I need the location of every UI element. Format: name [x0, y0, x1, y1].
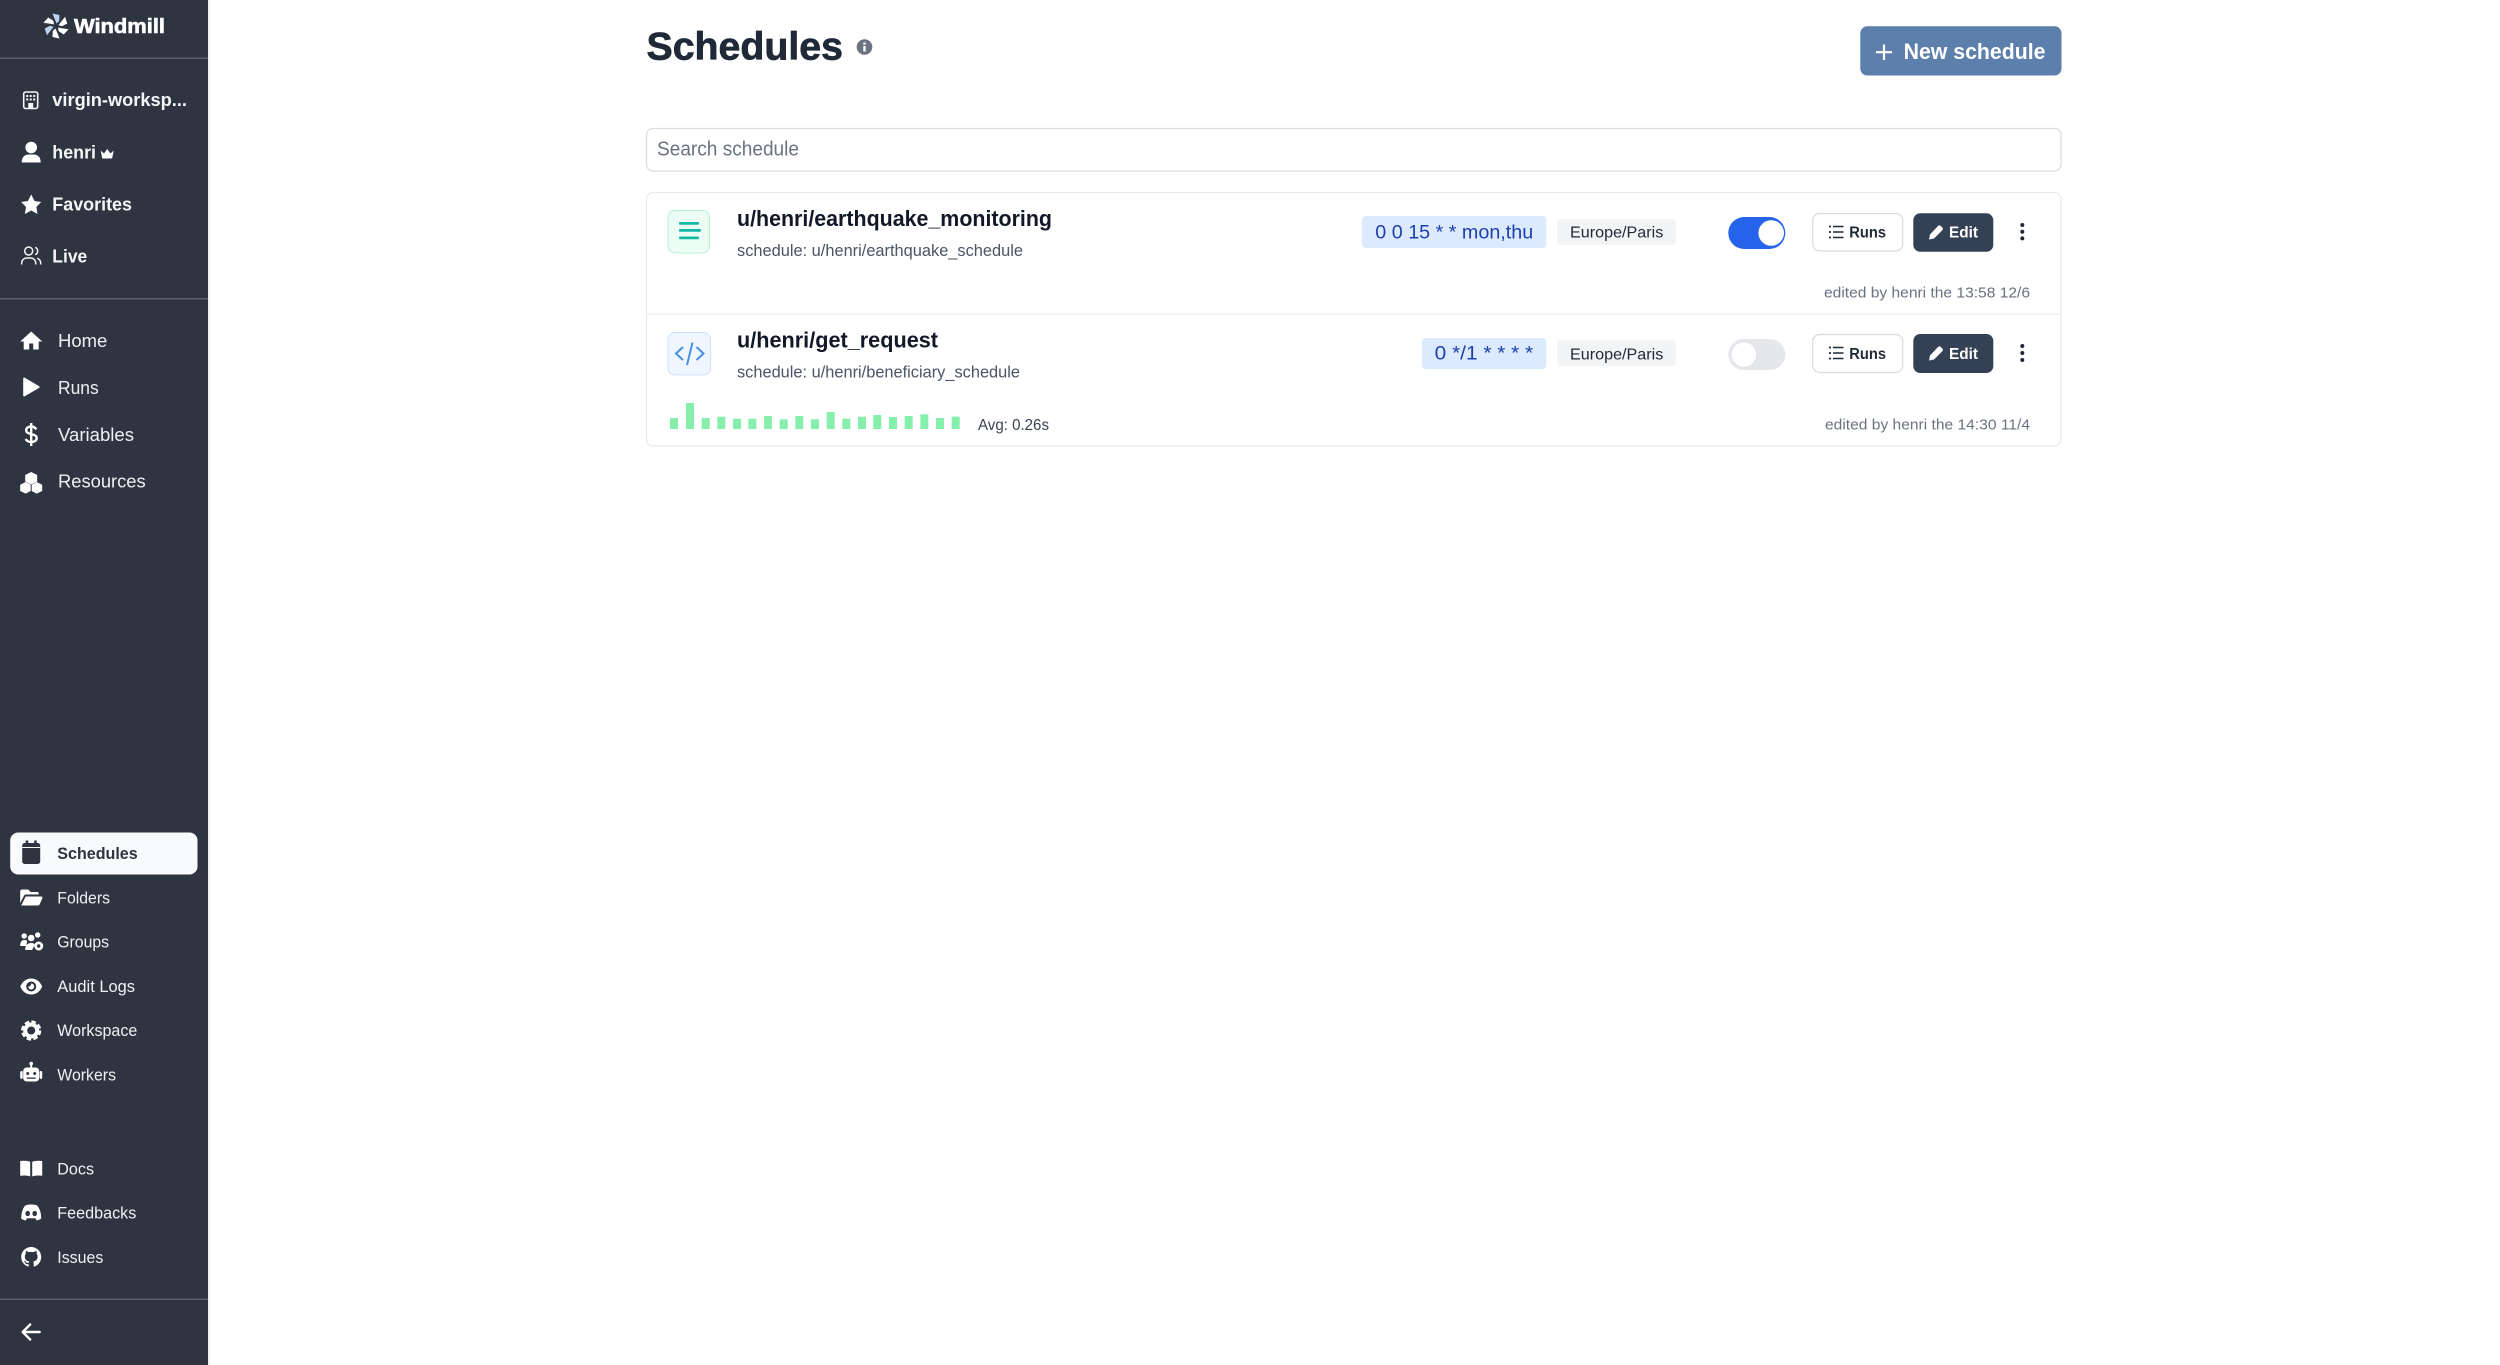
menu item: live	[22, 246, 87, 267]
search input	[646, 128, 2061, 171]
menu item: live: Live	[52, 246, 87, 267]
menu item: groups	[20, 932, 109, 952]
icon: code	[668, 332, 710, 375]
schedule path: schedule: u/henri/beneficiary_schedule	[737, 363, 1020, 382]
button: runs: Runs	[1849, 346, 1886, 363]
menu item: workspace: virgin-worksp...	[52, 89, 187, 110]
menu item: feedbacks: Feedbacks	[57, 1205, 136, 1223]
menu item: workers	[20, 1062, 116, 1085]
panel: schedule list	[646, 192, 2061, 446]
row: earthquake_monitoring	[668, 206, 2030, 301]
button: edit: Edit	[1949, 225, 1979, 242]
toggle: off	[1728, 339, 1785, 370]
search input: Search schedule	[657, 139, 799, 161]
menu item: user henri: henri	[52, 142, 96, 162]
edited meta: edited by henri the 14:30 11/4	[1825, 416, 2030, 434]
button: new schedule	[1860, 26, 2062, 76]
menu item: resources: Resources	[58, 470, 146, 492]
menu: kebab	[2020, 344, 2024, 362]
button: edit	[1913, 213, 1993, 252]
menu item: resources	[20, 470, 146, 494]
icon: info	[857, 39, 872, 55]
button: runs: Runs	[1849, 225, 1886, 242]
badge: timezone	[1557, 340, 1676, 366]
menu item: docs	[20, 1160, 94, 1178]
icon: collapse arrow	[23, 1324, 40, 1340]
heading: Schedules: Schedules	[646, 25, 843, 68]
menu item: folders	[20, 889, 110, 907]
menu item: schedules (active)	[10, 832, 198, 874]
menu item: variables	[26, 423, 134, 446]
menu item: workspace settings	[22, 1022, 137, 1040]
script path: u/henri/earthquake_monitoring	[737, 206, 1052, 231]
average runtime: Avg: 0.26s	[978, 417, 1049, 434]
menu item: folders: Folders	[57, 889, 110, 907]
button: new schedule: New schedule	[1904, 39, 2046, 64]
menu item: groups: Groups	[57, 934, 109, 952]
button: edit	[1913, 334, 1993, 373]
badge: cron	[1422, 338, 1546, 369]
edited meta: edited by henri the 13:58 12/6	[1824, 284, 2030, 301]
chart: runtime sparkline	[670, 403, 960, 429]
toggle: on	[1728, 217, 1785, 249]
row: get_request	[668, 328, 2030, 434]
schedule path: schedule: u/henri/earthquake_schedule	[737, 241, 1023, 260]
button: runs	[1813, 334, 1903, 372]
panel: sidebar	[0, 0, 210, 1365]
menu item: runs	[23, 377, 99, 398]
badge: timezone: Europe/Paris	[1570, 225, 1663, 242]
menu item: issues	[21, 1247, 103, 1267]
badge: timezone: Europe/Paris	[1570, 346, 1663, 363]
menu item: workers: Workers	[57, 1067, 116, 1085]
logo: Windmill: Windmill	[74, 15, 165, 38]
badge: cron: 0 0 15 * * mon,thu	[1375, 222, 1533, 244]
menu item: variables: Variables	[58, 424, 134, 445]
menu item: home	[20, 330, 107, 351]
button: runs	[1813, 214, 1903, 251]
menu item: audit logs	[20, 978, 135, 996]
badge: timezone	[1557, 219, 1676, 245]
badge: cron: 0 */1 * * * *	[1435, 342, 1534, 364]
menu item: schedules (active): Schedules	[57, 845, 138, 863]
menu item: runs: Runs	[58, 377, 99, 398]
menu item: user henri	[22, 142, 114, 162]
logo: Windmill	[43, 14, 165, 38]
menu item: home: Home	[58, 330, 107, 351]
menu item: favorites: Favorites	[52, 194, 132, 214]
menu item: workspace settings: Workspace	[57, 1022, 137, 1040]
menu item: feedbacks	[21, 1205, 136, 1223]
menu item: issues: Issues	[57, 1249, 103, 1267]
menu item: docs: Docs	[57, 1160, 94, 1178]
icon: flow	[668, 210, 710, 253]
badge: cron	[1362, 216, 1546, 248]
menu: kebab	[2020, 223, 2024, 240]
button: edit: Edit	[1949, 346, 1979, 363]
menu item: audit logs: Audit Logs	[57, 978, 135, 996]
script path: u/henri/get_request	[737, 328, 938, 353]
